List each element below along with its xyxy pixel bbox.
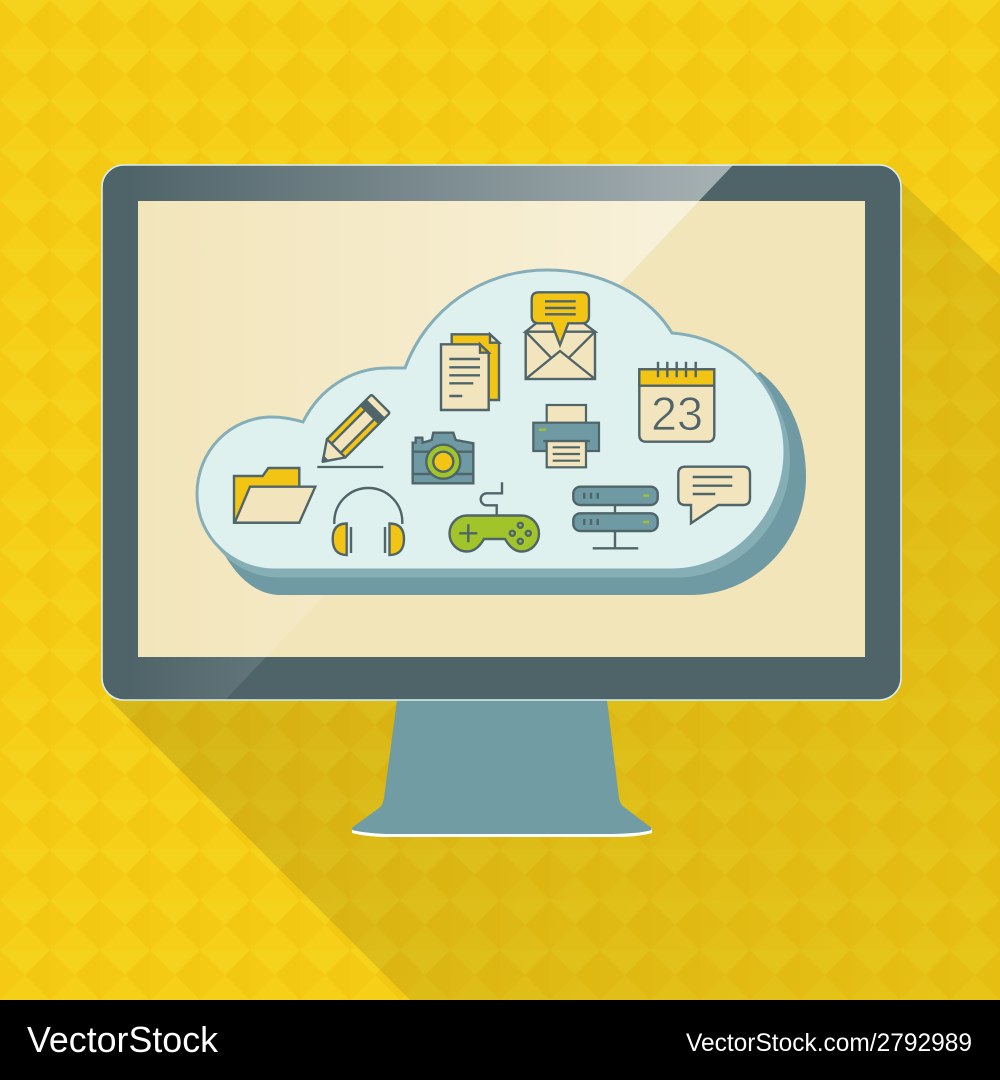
icon: documents <box>441 334 499 410</box>
icon: speech bubble <box>678 467 750 523</box>
cloud body <box>197 270 785 570</box>
footer brand name: VectorStock <box>27 1019 219 1060</box>
glass glare <box>188 165 733 700</box>
cloud <box>197 270 806 595</box>
icon: game controller <box>450 482 539 552</box>
icon: camera <box>413 433 473 483</box>
monitor screen <box>138 201 865 657</box>
icon: mail with message bubble <box>526 292 595 379</box>
icon: server rack <box>573 487 658 548</box>
icon: folder <box>234 468 315 523</box>
footer watermark bar <box>0 1000 1000 1080</box>
long shadow of monitor <box>110 182 1000 1000</box>
icon: headphones <box>333 488 404 555</box>
icon: printer <box>533 405 599 467</box>
calendar date: 23 <box>651 387 703 440</box>
icon: pencil <box>314 395 390 471</box>
monitor frame <box>102 165 901 700</box>
icon: calendar <box>639 362 714 442</box>
icon: pencil underline <box>317 466 383 468</box>
cloud edge band <box>202 278 790 578</box>
footer image url: VectorStock.com/2792989 <box>686 1029 972 1057</box>
monitor stand <box>352 700 652 837</box>
cloud extruded depth <box>222 372 806 595</box>
